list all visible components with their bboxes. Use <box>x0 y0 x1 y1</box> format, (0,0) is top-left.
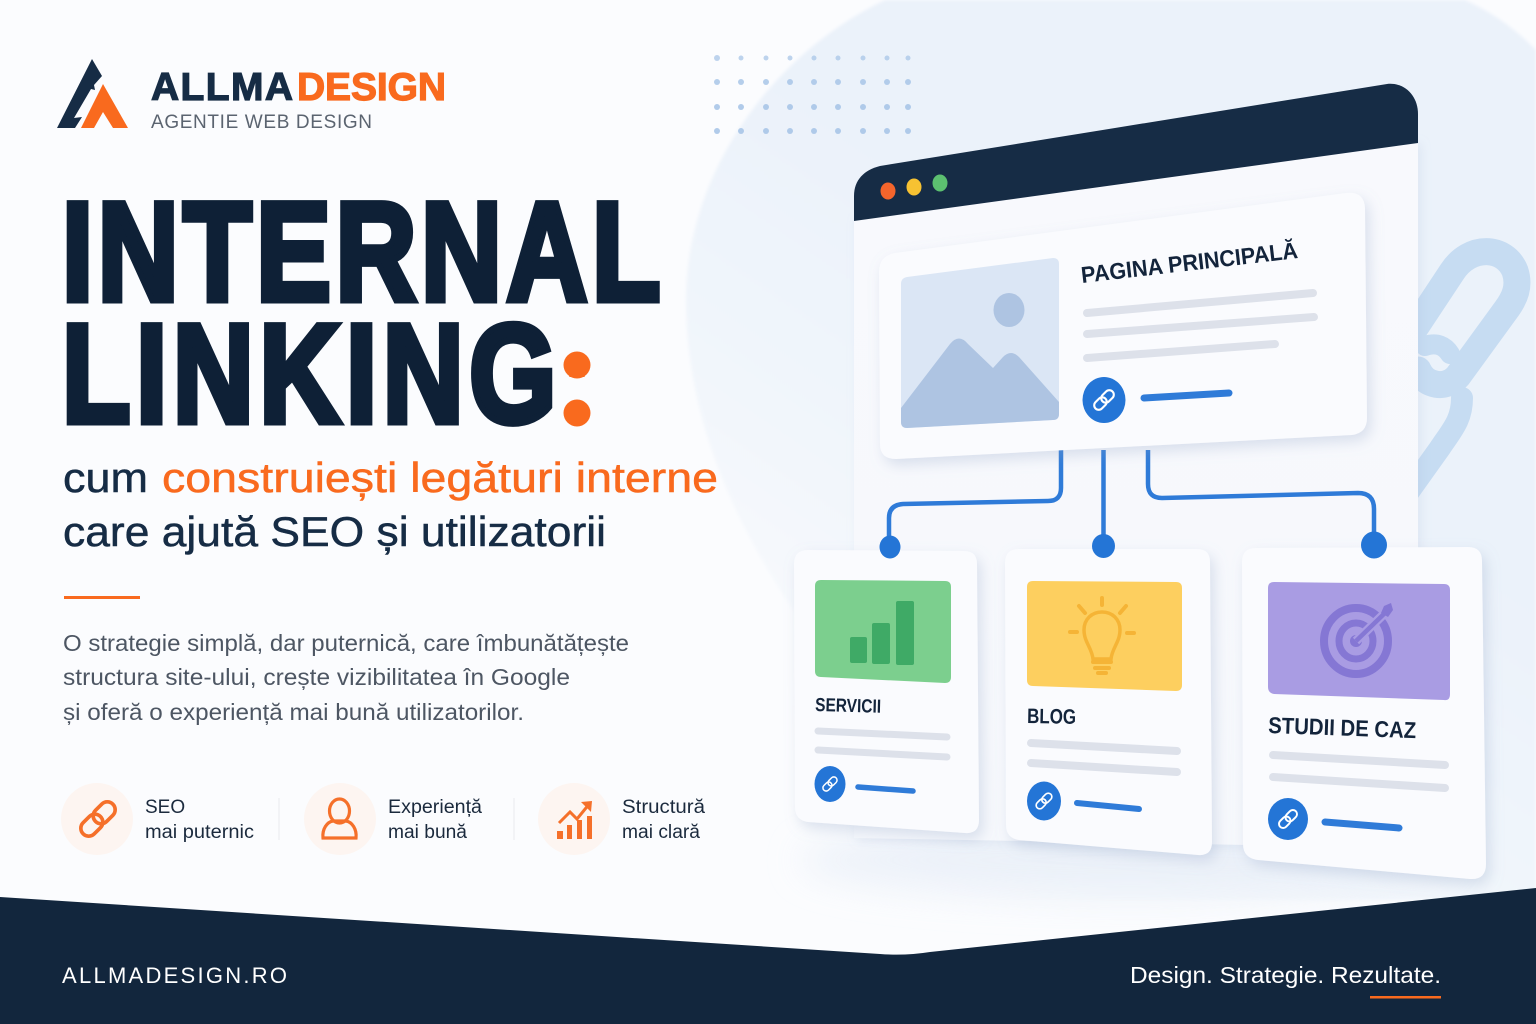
card background <box>1242 547 1486 879</box>
icon: link <box>61 783 133 855</box>
connector dot <box>880 536 900 558</box>
browser window <box>854 84 1418 848</box>
link bar <box>1144 393 1229 398</box>
card title: BLOG <box>1027 705 1076 729</box>
text lines <box>1087 293 1314 358</box>
link bar <box>1325 822 1399 828</box>
accent divider <box>64 596 140 599</box>
feature: experienta <box>304 783 482 855</box>
panel: blog <box>1005 534 1212 855</box>
description <box>63 630 629 725</box>
logo wordmark accent: DESIGN <box>297 66 446 109</box>
link bar <box>858 787 913 791</box>
footer band <box>0 888 1536 1024</box>
subtitle <box>63 454 718 555</box>
card background <box>879 193 1367 459</box>
connector dot <box>1361 532 1387 558</box>
icon: user <box>304 783 376 855</box>
link icon <box>1027 782 1061 820</box>
feature text <box>145 797 254 843</box>
logo wordmark: ALLMA <box>151 66 293 109</box>
window title bar <box>854 84 1418 221</box>
feature text: SEO <box>145 797 185 818</box>
connector dot <box>1092 534 1115 558</box>
dot grid decoration <box>714 55 911 134</box>
footer website: ALLMADESIGN.RO <box>62 963 287 988</box>
window control dots <box>880 174 948 200</box>
card title: SERVICII <box>815 695 881 718</box>
window body <box>854 140 1418 848</box>
card background <box>1005 549 1212 855</box>
logo mark <box>57 59 128 128</box>
description: structura site-ului, crește vizibilitatea în Google <box>63 664 570 690</box>
lightbulb icon <box>1070 598 1134 673</box>
yellow image <box>1027 581 1182 691</box>
text lines <box>1273 755 1445 788</box>
feature text: Structură <box>622 797 705 818</box>
link bar <box>1077 803 1139 809</box>
connector lines <box>889 450 1374 545</box>
text lines <box>1031 743 1177 772</box>
title: INTERNAL <box>62 173 660 330</box>
feature: seo <box>61 783 254 855</box>
title colon: : <box>559 309 595 452</box>
green image <box>815 580 951 683</box>
title: LINKING <box>62 295 556 452</box>
card title: PAGINA PRINCIPALĂ <box>1079 236 1299 288</box>
card background <box>794 550 979 833</box>
feature: structura <box>538 783 705 855</box>
feature text <box>388 797 482 843</box>
image placeholder <box>901 258 1059 428</box>
text lines <box>818 731 947 757</box>
subtitle: construiești legături interne <box>162 454 718 501</box>
subtitle: cum <box>63 454 148 501</box>
panel: servicii <box>794 536 979 833</box>
link icon <box>1082 377 1126 423</box>
background blob <box>686 0 1536 900</box>
subtitle: care ajută SEO și utilizatorii <box>63 508 606 555</box>
link icon <box>814 766 846 802</box>
feature text: mai puternic <box>145 822 254 843</box>
icon: growth chart <box>538 783 610 855</box>
panel: studii de caz <box>1242 532 1486 879</box>
panel: pagina principala <box>879 193 1367 459</box>
footer accent <box>1370 996 1441 998</box>
footer tagline: Design. Strategie. Rezultate. <box>1130 962 1441 988</box>
feature text: mai bună <box>388 822 467 843</box>
title <box>62 173 660 452</box>
link icon <box>1268 798 1308 840</box>
background chain icon <box>1405 252 1517 497</box>
target icon <box>1324 603 1393 674</box>
bar chart icon <box>850 601 914 665</box>
feature text: Experiență <box>388 797 482 818</box>
purple image <box>1268 582 1450 700</box>
logo <box>57 59 446 133</box>
card title: STUDII DE CAZ <box>1268 712 1417 743</box>
description: O strategie simplă, dar puternică, care îmbunătățește <box>63 630 629 656</box>
soft shade under cards <box>800 822 1460 898</box>
feature text <box>622 797 705 843</box>
feature text: mai clară <box>622 822 700 843</box>
logo tagline: AGENTIE WEB DESIGN <box>151 112 372 133</box>
description: și oferă o experiență mai bună utilizatorilor. <box>63 699 524 725</box>
